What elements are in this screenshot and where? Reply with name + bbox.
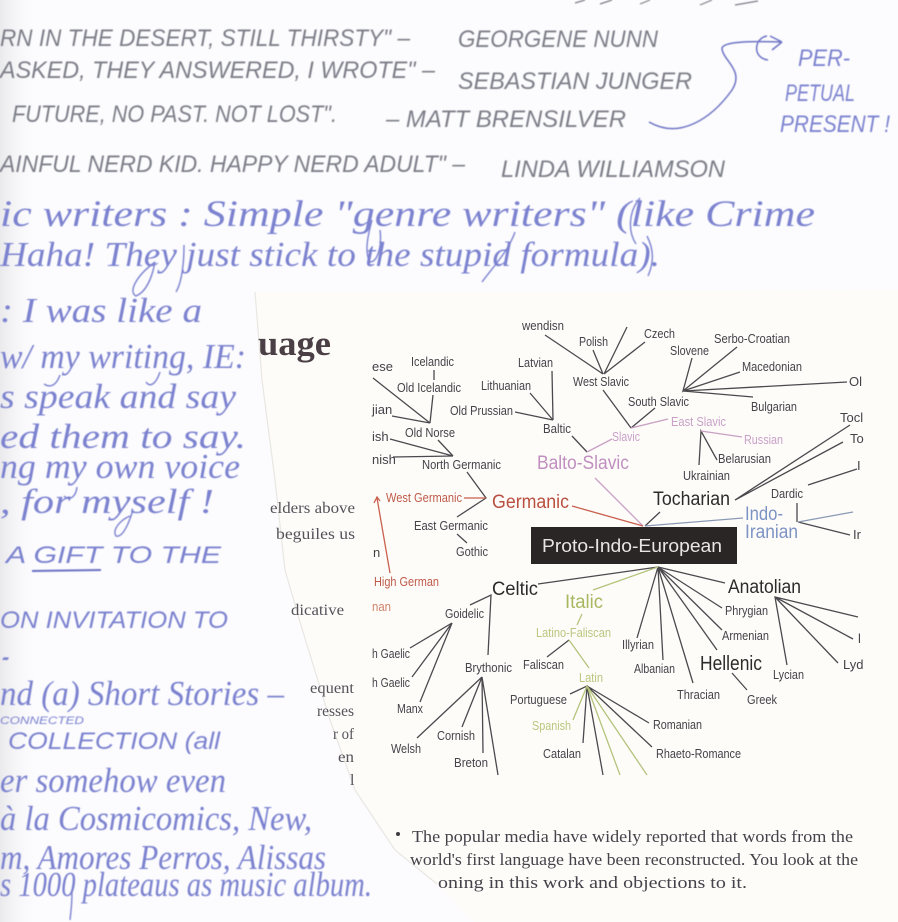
language labels: l (858, 631, 861, 646)
book body text fragments: resses (317, 703, 354, 720)
handwritten note: finding my voice: w/ my writing, IE: (0, 337, 246, 376)
language labels: Serbo-Croatian (714, 331, 790, 346)
language labels: Latin (579, 670, 603, 685)
blue branches (645, 512, 853, 526)
language labels: Breton (454, 755, 488, 770)
language labels: Ol (849, 374, 862, 389)
root label box (531, 527, 737, 564)
language labels: Gothic (456, 544, 488, 559)
language labels: Phrygian (725, 603, 768, 618)
language labels: Dardic (771, 486, 803, 501)
handwritten note: short stories: CONNECTED (0, 715, 84, 727)
handwritten quotes: FUTURE, NO PAST. NOT LOST". (12, 101, 337, 128)
language labels: ese (372, 359, 393, 374)
handwritten note: short stories: nd (a) Short Stories – (0, 674, 284, 713)
language labels: Old Icelandic (397, 380, 461, 395)
book body text fragments: beguiles us (276, 526, 355, 543)
language labels: Czech (644, 326, 675, 341)
handwritten quotes: RN IN THE DESERT, STILL THIRSTY" – (0, 25, 411, 52)
book body text fragments: r of (333, 726, 355, 743)
handwritten note: finding my voice: ed them to say. (0, 417, 246, 456)
language labels: Welsh (391, 741, 421, 756)
book body text fragments: dicative (291, 602, 344, 619)
language labels: Tocl (840, 410, 863, 425)
language labels: To (850, 431, 864, 446)
red branches (374, 497, 643, 573)
language labels: I (857, 458, 861, 473)
handwritten note: finding my voice: ON INVITATION TO (0, 607, 228, 634)
handwritten quotes: – MATT BRENSILVER (385, 106, 626, 133)
language labels: Rhaeto-Romance (656, 746, 741, 761)
language labels: Portuguese (510, 692, 567, 707)
handwritten note: finding my voice: , for myself ! (0, 482, 214, 521)
language labels: Faliscan (523, 657, 564, 672)
language labels: Greek (747, 692, 777, 707)
language labels: West Slavic (573, 374, 629, 389)
pink branches (587, 419, 742, 526)
language labels: East Slavic (671, 414, 726, 429)
language labels: High German (374, 574, 439, 589)
language labels: Cornish (437, 728, 475, 743)
book body text fragments: elders above (270, 500, 355, 517)
bullet question text: world's first language have been reconstructed. You look at the (410, 850, 858, 869)
language labels: Armenian (722, 628, 769, 643)
language labels: n (373, 545, 380, 560)
language labels: Romanian (653, 717, 702, 732)
handwritten note: genre writers: ic writers : Simple "genre writers" (like Crime (0, 194, 815, 235)
handwritten note: genre writers: Haha! They just stick to the stupid formula). (0, 235, 660, 274)
language labels: Brythonic (465, 660, 512, 675)
branch family labels: Tocharian (653, 489, 730, 510)
book body text fragments: equent (310, 680, 355, 697)
language labels: jian (371, 402, 392, 417)
language labels: h Gaelic (372, 646, 410, 661)
branch family labels (492, 453, 801, 675)
handwritten note: genre writers (0, 194, 815, 296)
handwritten quotes: GEORGENE NUNN (458, 26, 659, 53)
handwritten note: perpetual present with arrow: PETUAL (785, 80, 855, 107)
green branches (569, 567, 658, 775)
handwritten note: finding my voice (0, 291, 246, 666)
language labels: Russian (744, 432, 783, 447)
handwritten note: short stories (0, 674, 372, 920)
language labels: Lycian (773, 667, 804, 682)
language labels: Ir (853, 527, 862, 542)
language labels: Old Prussian (450, 403, 513, 418)
language labels: Illyrian (622, 637, 654, 652)
language labels: Ukrainian (683, 468, 730, 483)
bullet question text: oning in this work and objections to it. (438, 873, 747, 892)
language labels: Slavic (612, 429, 640, 444)
language labels: ish (372, 429, 389, 444)
language labels: Catalan (543, 746, 581, 761)
language labels: Spanish (532, 718, 571, 733)
book body text fragments: en (338, 749, 354, 766)
language labels: Lithuanian (481, 378, 531, 393)
language labels: Slovene (670, 343, 709, 358)
language labels: Manx (397, 701, 423, 716)
branch family labels: Celtic (492, 579, 538, 600)
handwritten note: perpetual present with arrow: PER- (798, 45, 850, 72)
language labels: East Germanic (414, 518, 488, 533)
branch family labels: Hellenic (700, 653, 762, 675)
language labels: Macedonian (742, 359, 802, 374)
handwritten note: finding my voice: s speak and say (0, 377, 236, 416)
language tree chart (371, 318, 864, 775)
handwritten note: finding my voice: : I was like a (0, 291, 202, 330)
black branches (373, 327, 858, 775)
language labels (371, 318, 864, 770)
language labels: Icelandic (411, 354, 454, 369)
branch family labels: Iranian (745, 522, 798, 543)
language labels: Old Norse (405, 425, 455, 440)
language labels: Belarusian (718, 451, 771, 466)
book body text fragments: l (350, 772, 355, 789)
handwritten note: finding my voice: ng my own voice (0, 447, 240, 486)
language labels: Polish (579, 334, 608, 349)
branch family labels: Indo- (745, 504, 783, 525)
handwritten note: finding my voice: . (0, 639, 16, 666)
root label box: Proto-Indo-European (542, 536, 722, 556)
language labels: nan (372, 599, 391, 614)
handwritten note: short stories: s 1000 plateaus as music album. (0, 865, 372, 904)
handwritten quotes: ASKED, THEY ANSWERED, I WROTE" – (0, 57, 436, 84)
handwritten quotes: AINFUL NERD KID. HAPPY NERD ADULT" – (0, 151, 466, 178)
language labels: West Germanic (386, 490, 462, 505)
language labels: wendisn (521, 318, 564, 333)
handwritten note: short stories: COLLECTION (all (8, 728, 221, 755)
language labels: nish (372, 452, 396, 467)
branch family labels: Italic (565, 592, 603, 613)
handwritten quotes (0, 0, 758, 183)
language labels: Lyd (843, 657, 863, 672)
book body text fragments (270, 500, 355, 789)
handwritten note: finding my voice: A GIFT TO THE (3, 542, 222, 569)
book heading fragment: uage (258, 324, 331, 363)
language labels: Thracian (677, 687, 720, 702)
language labels: Albanian (634, 661, 675, 676)
language labels: North Germanic (422, 457, 501, 472)
handwritten note: short stories: à la Cosmicomics, New, (0, 799, 312, 838)
language labels: Goidelic (445, 606, 484, 621)
handwritten quotes: SEBASTIAN JUNGER (458, 68, 692, 95)
handwritten note: short stories: er somehow even (0, 761, 226, 800)
language labels: Bulgarian (751, 399, 797, 414)
branch family labels: Anatolian (728, 577, 801, 598)
handwritten note: short stories: m, Amores Perros, Alissas (0, 838, 326, 877)
language labels: South Slavic (628, 394, 689, 409)
language labels: Latino-Faliscan (536, 625, 611, 640)
bullet question text: The popular media have widely reported that words from the (412, 827, 853, 846)
language labels: h Gaelic (372, 675, 410, 690)
panel: torn book page (255, 290, 898, 922)
branch family labels: Balto-Slavic (537, 453, 629, 474)
handwritten quotes: LINDA WILLIAMSON (501, 156, 726, 183)
language labels: Baltic (543, 421, 571, 436)
language labels: Latvian (518, 355, 553, 370)
branch family labels: Germanic (492, 492, 569, 513)
bullet question text (396, 827, 858, 892)
handwritten note: perpetual present with arrow (649, 36, 890, 138)
